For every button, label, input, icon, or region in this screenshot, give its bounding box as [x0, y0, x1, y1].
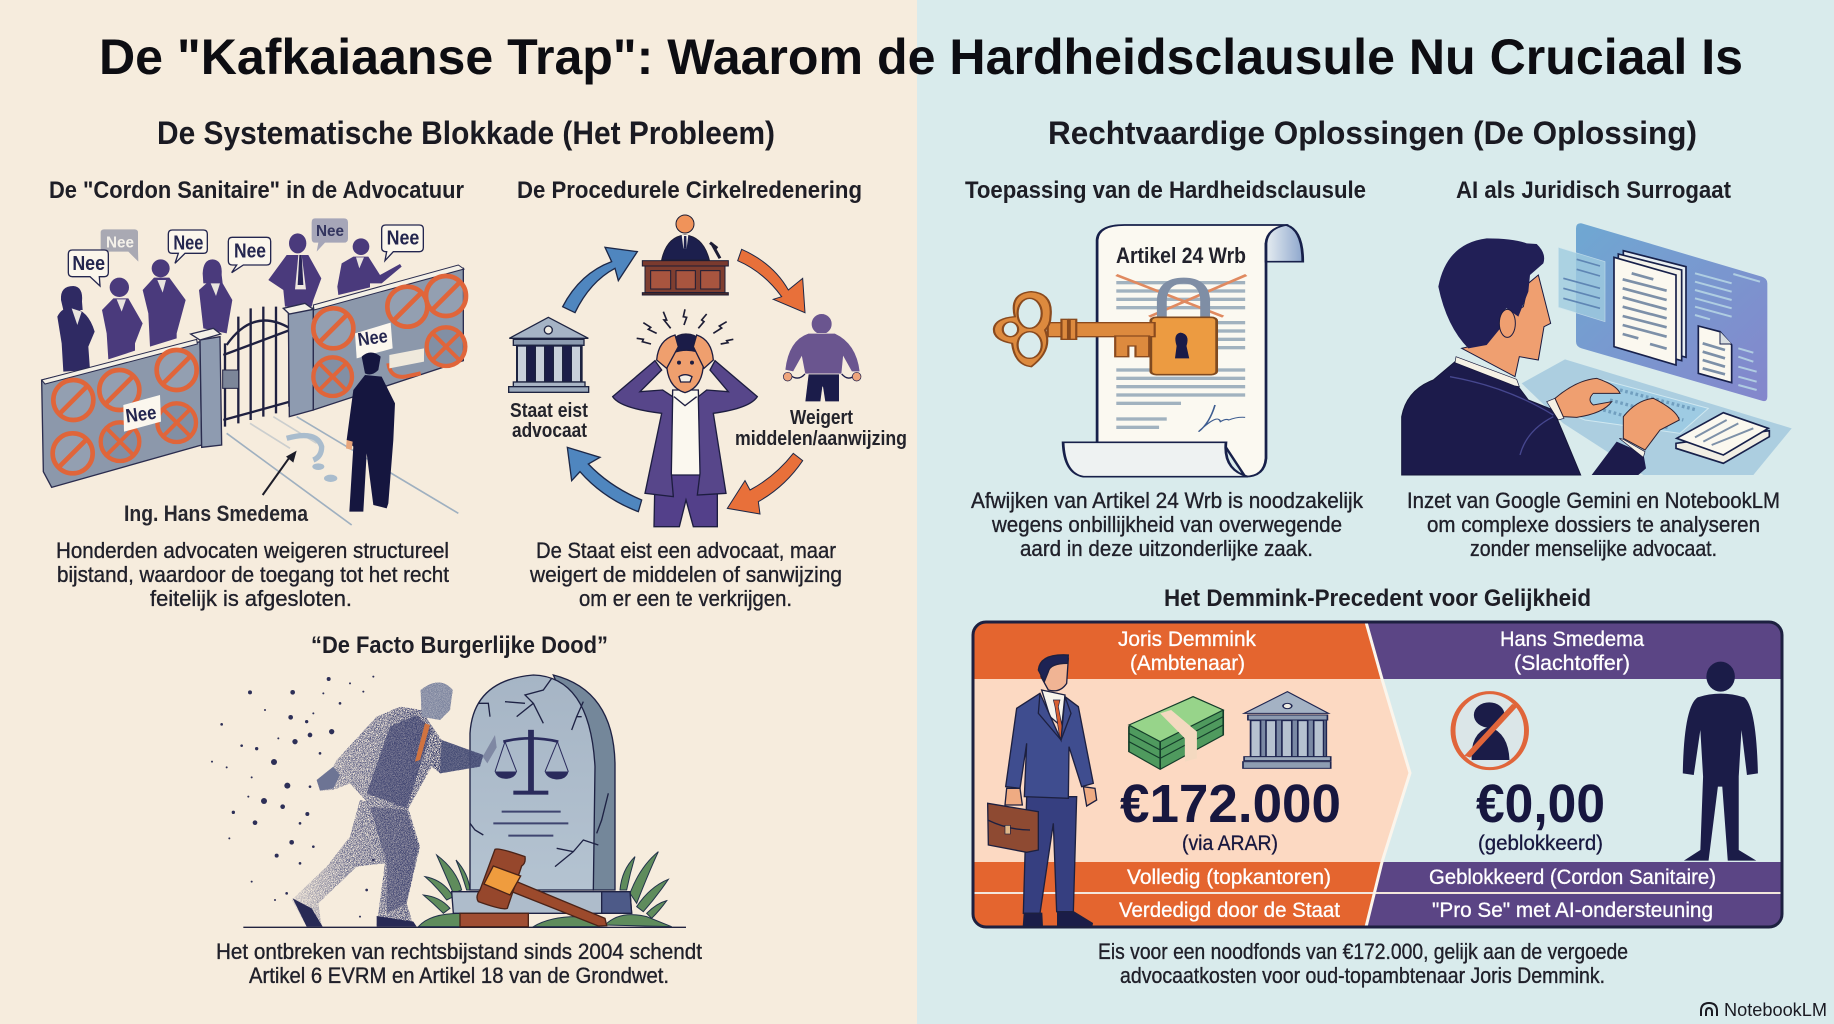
- figure: Joris Demmink: [988, 655, 1097, 927]
- figure: dissolving man: [292, 682, 483, 927]
- amount: 0,00: €0,00: [1476, 774, 1605, 834]
- floating panel: [1558, 247, 1605, 322]
- text: circular reasoning: om er een te verkrijgen.: [579, 586, 792, 611]
- text: emergency fund: [1098, 939, 1628, 988]
- heading: solution: Rechtvaardige Oplossingen (De Oplossing): [1048, 115, 1697, 151]
- background: right panel: [917, 0, 1834, 1024]
- icon: state building: [509, 317, 589, 392]
- bubble labels: [72, 223, 419, 275]
- label: Staat eist advocaat: [510, 400, 588, 442]
- text: emergency fund: Eis voor een noodfonds van €172.000, gelijk aan de vergoede: [1098, 939, 1628, 964]
- jacket sleeve: [1592, 442, 1646, 475]
- left wall: Nee: [124, 403, 158, 428]
- arrow: orange bottom-right: [727, 453, 803, 514]
- text: circular reasoning: weigert de middelen of sanwijzing: [529, 562, 842, 587]
- subheading: AI surrogate: AI als Juridisch Surrogaat: [1456, 177, 1731, 204]
- icon: question mark on path: [287, 436, 337, 482]
- heading: problem: De Systematische Blokkade (Het Probleem): [157, 115, 775, 151]
- illustration: man at laptop with holographic documents: [1402, 223, 1792, 475]
- arrow: blue bottom-left: [567, 447, 642, 512]
- ground path: [227, 417, 458, 525]
- speech bubbles Nee: [68, 218, 423, 286]
- crossed-out marks: [1116, 275, 1246, 317]
- notes: [1676, 413, 1769, 463]
- icon: person with empty pockets: [783, 314, 861, 402]
- panel border: [973, 622, 1782, 927]
- text: circular reasoning: [529, 538, 842, 611]
- row: right access: Geblokkeerd (Cordon Sanitaire): [1429, 866, 1716, 889]
- text: hardship clause: [971, 488, 1364, 561]
- label: Ing. Hans Smedema: Ing. Hans Smedema: [124, 501, 309, 526]
- ear: [1499, 309, 1515, 337]
- panel: cordon sanitaire: [42, 177, 466, 611]
- comparison table: [973, 622, 1782, 927]
- subheading: hardship clause: Toepassing van de Hardheidsclausule: [965, 177, 1366, 204]
- bubble labels: Nee: [316, 223, 344, 240]
- face: [1041, 658, 1068, 691]
- text: AI surrogate: [1407, 488, 1780, 561]
- man: [1402, 238, 1679, 475]
- briefcase: [988, 803, 1038, 852]
- row: left access: Volledig (topkantoren): [1127, 866, 1331, 889]
- row divider: [973, 892, 1782, 894]
- text: hardship clause: Afwijken van Artikel 24 Wrb is noodzakelijk: [971, 488, 1364, 513]
- arrow to Hans Smedema: [263, 451, 297, 495]
- centre chevron: [1366, 622, 1410, 927]
- left wall: [42, 339, 202, 487]
- label: Weigert middelen/aanwijzing: middelen/aanwijzing: [735, 428, 907, 450]
- right wall: Nee: [356, 325, 389, 350]
- amount: 0,00: (geblokkeerd): [1478, 832, 1603, 855]
- hands: [1555, 378, 1620, 417]
- lawyers silhouettes: [57, 233, 402, 372]
- scroll: [1063, 225, 1303, 477]
- bubble labels: Nee: [72, 253, 105, 275]
- text: cordon sanitaire: feitelijk is afgesloten.: [150, 586, 352, 611]
- left body: [973, 622, 1410, 927]
- panel: civil death: [211, 632, 702, 988]
- jacket: [1402, 362, 1581, 475]
- right bands: [1366, 862, 1782, 927]
- holographic screen: [1576, 223, 1767, 401]
- title: De "Kafkaiaanse Trap": Waarom de Hardheidsclausule Nu Cruciaal Is: [99, 29, 1743, 85]
- icon: blocked lawyer: [1453, 693, 1526, 769]
- right header: [1366, 622, 1782, 679]
- subheading: circular reasoning: De Procedurele Cirkelredenering: [517, 177, 862, 204]
- row: left defence: Verdedigd door de Staat: [1119, 899, 1340, 922]
- shoes: [293, 898, 417, 927]
- panel: AI as legal surrogate: [1402, 177, 1792, 561]
- dissolving man: solid core: [317, 682, 497, 913]
- figure: silhouette Hans Smedema: [1683, 662, 1758, 861]
- trousers: [1023, 797, 1077, 913]
- ground line: [243, 925, 686, 929]
- hair: [1438, 238, 1544, 348]
- text: cordon sanitaire: Honderden advocaten weigeren structureel: [56, 538, 449, 563]
- icon: bank building: [1243, 692, 1331, 768]
- header: Hans Smedema: Hans Smedema: [1500, 628, 1644, 651]
- label: Weigert middelen/aanwijzing: [735, 407, 907, 450]
- amount: 172.000: (via ARAR): [1182, 832, 1278, 855]
- header: Hans Smedema: [1500, 628, 1644, 675]
- text: civil death: [216, 939, 702, 988]
- row: right defence: "Pro Se" met AI-ondersteuning: [1432, 899, 1713, 922]
- right wall: [313, 265, 466, 410]
- label: Staat eist advocaat: advocaat: [512, 420, 587, 442]
- label: Weigert middelen/aanwijzing: Weigert: [790, 407, 853, 429]
- tie and collar: [415, 723, 430, 762]
- icon: money stack: [1129, 697, 1223, 769]
- figure: Hans Smedema: [346, 352, 395, 512]
- label: Staat eist advocaat: Staat eist: [510, 400, 588, 422]
- header: Hans Smedema: (Slachtoffer): [1514, 652, 1630, 675]
- text: AI surrogate: zonder menselijke advocaat.: [1470, 536, 1717, 561]
- gravestone: [452, 675, 632, 913]
- document lines: [1116, 281, 1245, 429]
- icons: [1129, 662, 1758, 861]
- illustration: key, lock and scroll: [994, 225, 1303, 477]
- panel: procedural circular reasoning: [509, 177, 907, 611]
- icon: scales of justice: [495, 730, 568, 795]
- chart: cycle diagram: [509, 215, 861, 527]
- amount: 172.000: €172.000: [1120, 774, 1341, 834]
- jacket highlights: [1450, 377, 1553, 455]
- header: Joris Demmink: [1118, 628, 1256, 675]
- illustration: dissolving man, gravestone, gavel: [211, 675, 686, 927]
- key: [994, 292, 1155, 367]
- inscription lines: [493, 812, 568, 836]
- gate: [223, 307, 290, 427]
- text: AI surrogate: Inzet van Google Gemini en NotebookLM: [1407, 488, 1780, 513]
- laptop platform: [1522, 359, 1792, 475]
- figure: stressed man: [613, 334, 757, 527]
- signature: [1199, 405, 1245, 432]
- gavel: [460, 849, 607, 927]
- panel: Demmink precedent: [973, 585, 1782, 988]
- shoes: [1023, 912, 1092, 927]
- bubble labels: Nee: [173, 232, 203, 254]
- left bands: [973, 862, 1382, 927]
- subheading: Demmink precedent: Het Demmink-Precedent voor Gelijkheid: [1164, 585, 1591, 612]
- text: cordon sanitaire: bijstand, waardoor de toegang tot het recht: [57, 562, 449, 587]
- hands: [1005, 787, 1097, 806]
- background: left panel: [0, 0, 917, 1024]
- bubble labels: Nee: [387, 228, 419, 250]
- hair: [1038, 655, 1068, 682]
- particles: [211, 676, 375, 918]
- icon: stress marks: [637, 309, 733, 344]
- cracks: [470, 678, 608, 867]
- subheading: cordon sanitaire: De "Cordon Sanitaire" in de Advocatuur: [49, 177, 464, 204]
- text: cordon sanitaire: [56, 538, 449, 611]
- left header: [973, 622, 1382, 679]
- neck and face: [1462, 275, 1551, 377]
- right body: [1366, 622, 1782, 927]
- documents stack: [1614, 251, 1732, 383]
- text: circular reasoning: De Staat eist een advocaat, maar: [536, 538, 836, 563]
- text: hardship clause: wegens onbillijkheid van overwegende: [991, 512, 1342, 537]
- label: Artikel 24 Wrb: Artikel 24 Wrb: [1116, 243, 1246, 268]
- text: emergency fund: advocaatkosten voor oud-topambtenaar Joris Demmink.: [1120, 963, 1605, 988]
- arrow: blue top-left: [563, 247, 637, 313]
- gate pillars: [191, 303, 313, 447]
- jacket: [1006, 693, 1093, 798]
- panel: hardship clause: [965, 177, 1366, 561]
- text: civil death: Het ontbreken van rechtsbijstand sinds 2004 schendt: [216, 939, 702, 964]
- bubble labels: Nee: [106, 234, 134, 251]
- subheading: de facto civil death: “De Facto Burgerlijke Dood”: [311, 632, 608, 659]
- tie: [1053, 700, 1063, 739]
- logo: NotebookLM: NotebookLM: [1724, 1000, 1827, 1020]
- header: Joris Demmink: Joris Demmink: [1118, 628, 1256, 651]
- illustration: wall, gate and lawyers: [42, 218, 466, 525]
- screen text lines: [1695, 273, 1760, 390]
- collar and cuffs: [1455, 357, 1645, 457]
- document text lines: [1623, 273, 1725, 374]
- header: Joris Demmink: (Ambtenaar): [1130, 652, 1245, 675]
- text: civil death: Artikel 6 EVRM en Artikel 18 van de Grondwet.: [249, 963, 669, 988]
- shirt: [1042, 690, 1065, 727]
- arrow: orange top-right: [738, 249, 805, 313]
- grass: [418, 852, 672, 927]
- padlock: [1151, 281, 1217, 375]
- icon: judge at bench: [642, 215, 728, 295]
- text: AI surrogate: om complexe dossiers te analyseren: [1427, 512, 1760, 537]
- bubble labels: Nee: [234, 241, 266, 263]
- text: hardship clause: aard in deze uitzonderlijke zaak.: [1020, 536, 1313, 561]
